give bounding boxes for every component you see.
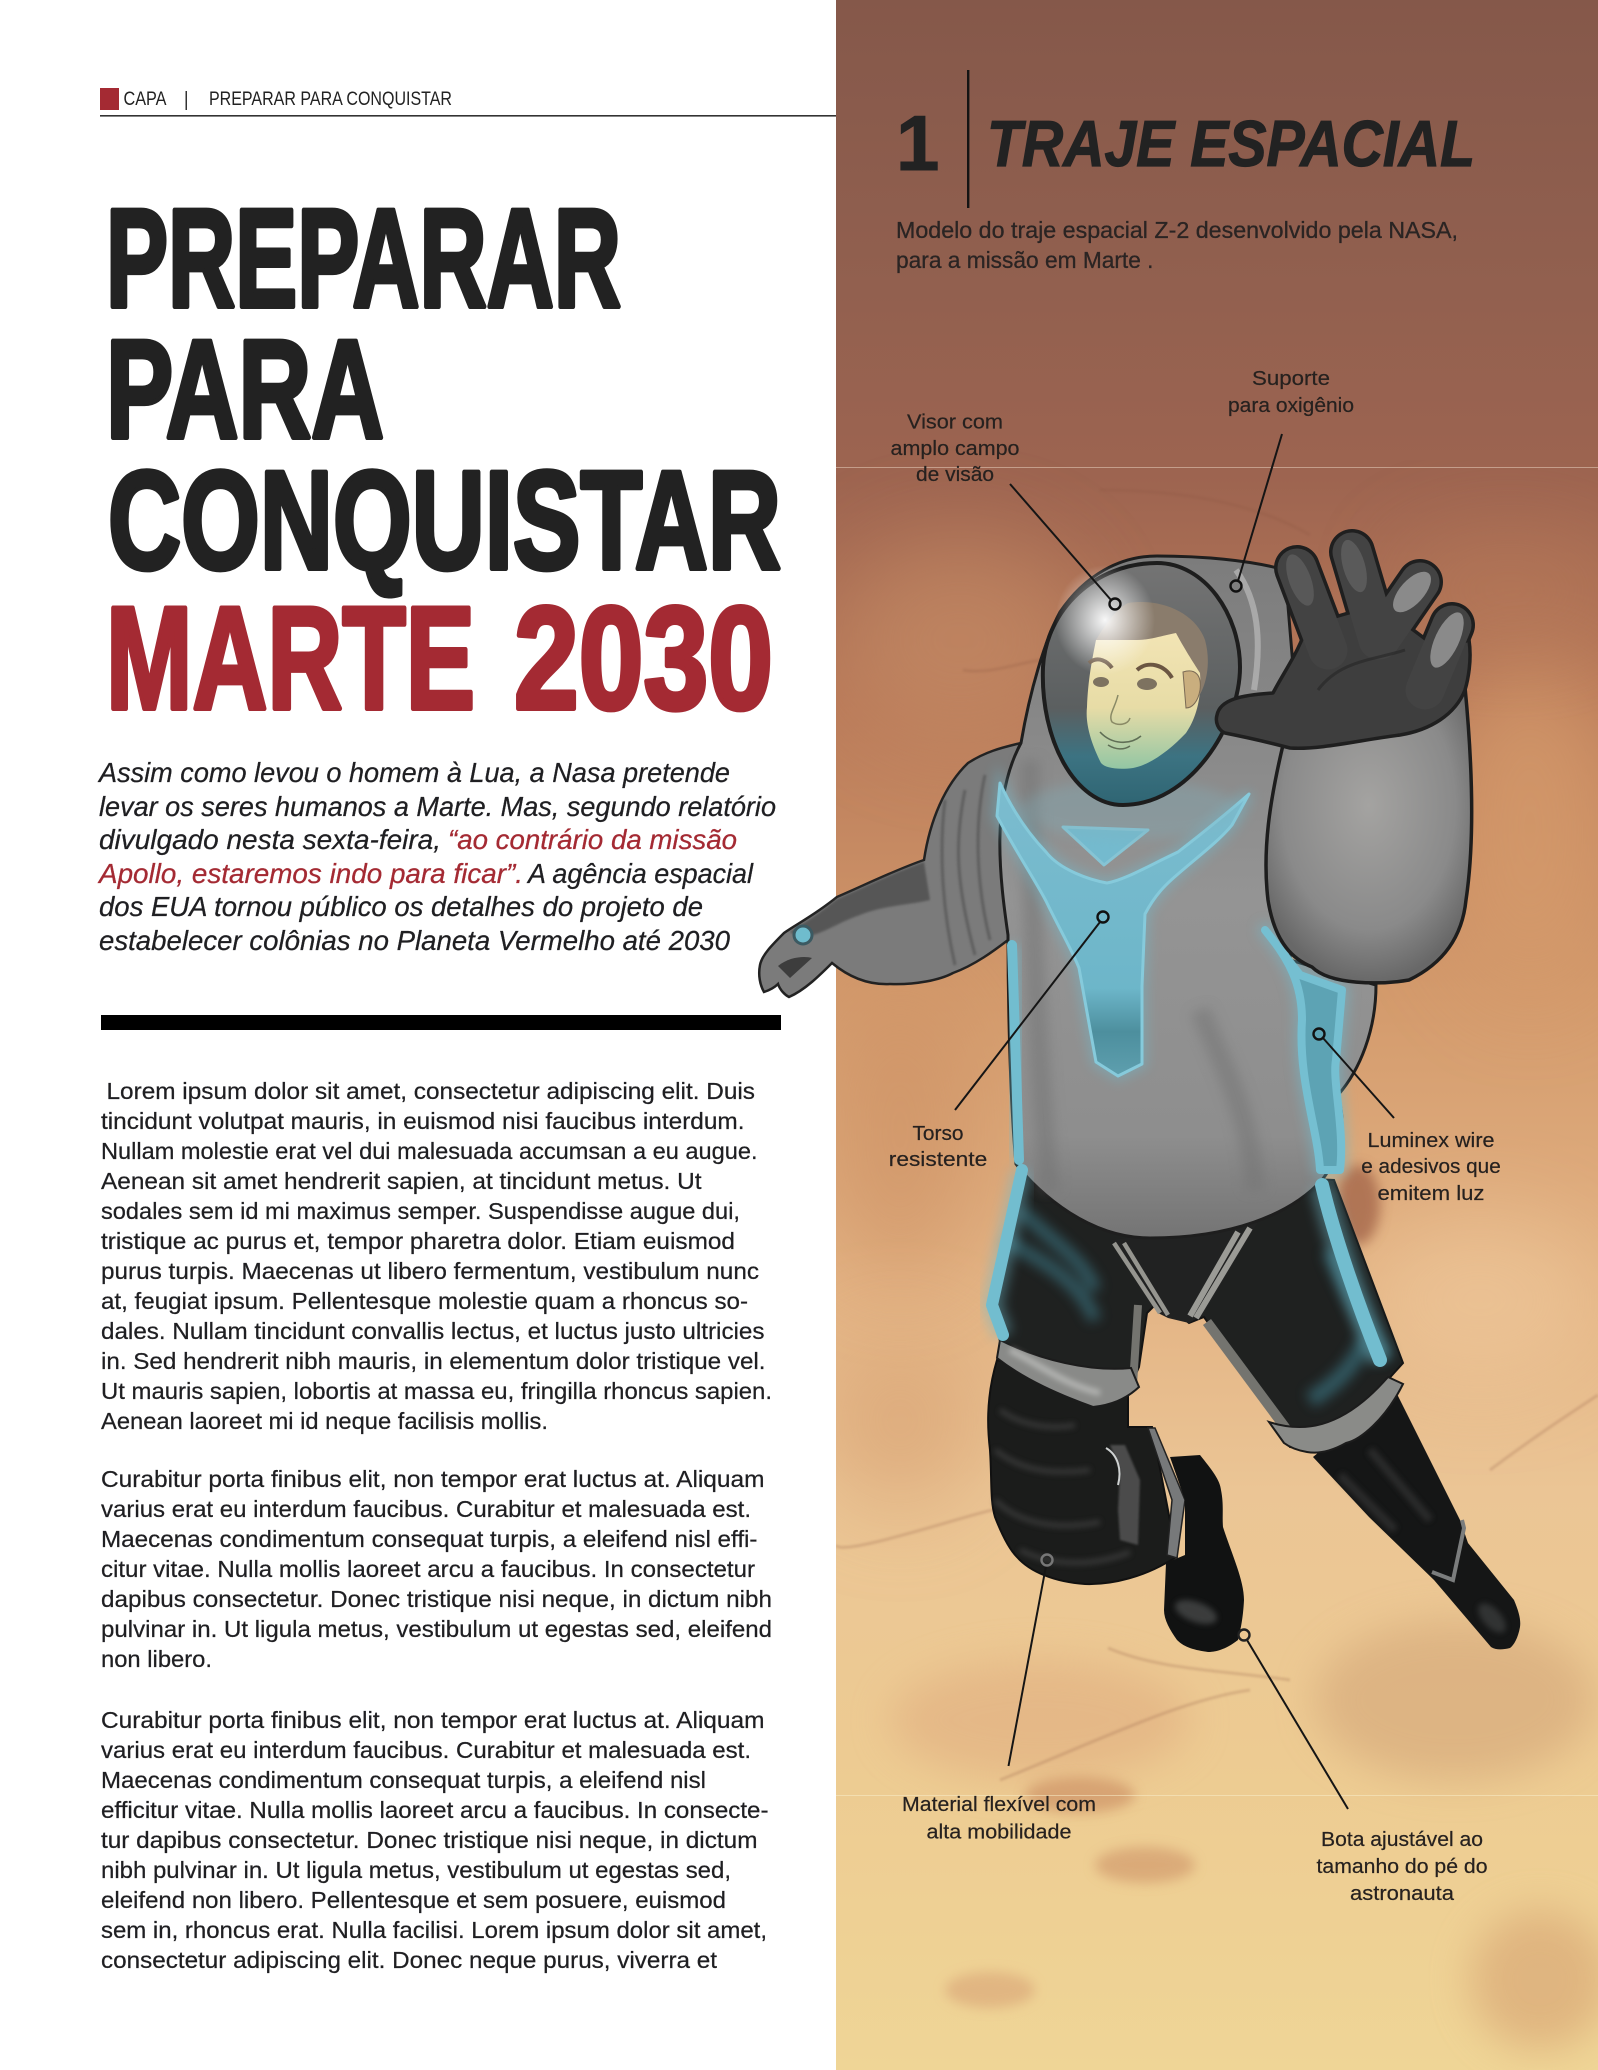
body text: non libero. — [101, 1646, 212, 1672]
body text: varius erat eu interdum faucibus. Curabitur et malesuada est. — [101, 1737, 751, 1763]
inner thigh strip — [1207, 1322, 1287, 1430]
wrist light — [794, 926, 812, 944]
leader line — [1008, 1566, 1046, 1766]
title — [106, 180, 781, 740]
body text: varius erat eu interdum faucibus. Curabitur et malesuada est. — [101, 1496, 751, 1522]
section subtitle: Modelo do traje espacial Z-2 desenvolvido pela NASA, — [896, 217, 1458, 243]
label: astronauta — [1350, 1882, 1455, 1905]
finger fills — [1297, 552, 1452, 690]
torso and hood — [1000, 556, 1376, 1238]
intro text: A agência espacial — [526, 858, 754, 889]
body text: Ut mauris sapien, lobortis at massa eu, fringilla rhoncus sapien. — [101, 1378, 772, 1404]
intro text: Assim como levou o homem à Lua, a Nasa pretende — [97, 757, 730, 788]
section header — [100, 88, 836, 117]
body text: dapibus consectetur. Donec tristique nisi neque, in dictum nibh — [101, 1586, 772, 1612]
title: PARA — [106, 310, 384, 468]
body text: sodales sem id mi maximus semper. Suspendisse augue dui, — [101, 1198, 740, 1224]
label: para oxigênio — [1228, 394, 1354, 417]
leader line — [1247, 1640, 1348, 1809]
illustration: astronaut in Z-2 suit — [759, 537, 1520, 1652]
intro text — [97, 757, 776, 956]
body text: Maecenas condimentum consequat turpis, a eleifend nisl — [101, 1767, 706, 1793]
running title: PREPARAR PARA CONQUISTAR — [209, 88, 452, 110]
label: tamanho do pé do — [1316, 1855, 1488, 1878]
label: Material flexível com — [902, 1793, 1096, 1816]
callout: bota ajustavel — [1238, 1630, 1488, 1905]
label: Bota ajustável ao — [1321, 1828, 1483, 1851]
lower right leg — [1313, 1390, 1520, 1649]
label: alta mobilidade — [926, 1820, 1072, 1844]
body text: Lorem ipsum dolor sit amet, consectetur adipiscing elit. Duis — [106, 1078, 755, 1104]
body text: pulvinar in. Ut ligula metus, vestibulum ut egestas sed, eleifend — [101, 1616, 772, 1642]
intro text: levar os seres humanos a Marte. Mas, segundo relatório — [99, 791, 776, 822]
label: resistente — [889, 1148, 987, 1171]
intro text: estabelecer colônias no Planeta Vermelho até 2030 — [99, 925, 731, 956]
section title: TRAJE ESPACIAL — [987, 107, 1475, 180]
label: emitem luz — [1378, 1182, 1484, 1205]
intro text: Apollo, estaremos indo para ficar”. — [97, 858, 523, 889]
leader line — [1010, 484, 1111, 600]
panel heading: traje espacial: para a missão em Marte . — [896, 247, 1154, 273]
label: Suporte — [1252, 367, 1330, 390]
body text: Aenean laoreet mi id neque facilisis mollis. — [101, 1408, 548, 1434]
right knee cuff — [1269, 1377, 1403, 1453]
label — [1316, 1828, 1488, 1905]
label: de visão — [916, 463, 994, 486]
body text: purus turpis. Maecenas ut libero fermentum, vestibulum nunc — [101, 1258, 759, 1284]
body text: at, feugiat ipsum. Pellentesque molestie quam a rhoncus so- — [101, 1288, 748, 1314]
label: e adesivos que — [1361, 1155, 1501, 1178]
callout: suporte para oxigenio — [1228, 367, 1354, 592]
body text: tincidunt volutpat mauris, in euismod nisi faucibus interdum. — [101, 1108, 744, 1134]
label: amplo campo — [890, 437, 1020, 460]
boot — [1164, 1455, 1244, 1652]
crotch panel — [1112, 1222, 1258, 1323]
leader line — [955, 922, 1100, 1110]
title: PREPARAR — [106, 180, 621, 336]
finger outlines — [1297, 552, 1452, 690]
title: CONQUISTAR — [108, 442, 781, 598]
label — [1228, 367, 1354, 417]
body text: Curabitur porta finibus elit, non tempor erat luctus at. Aliquam — [101, 1707, 764, 1733]
panel heading: traje espacial — [896, 70, 1475, 273]
body text: in. Sed hendrerit nibh mauris, in elementum dolor tristique vel. — [101, 1348, 765, 1374]
collar strap — [1236, 570, 1258, 690]
body text: Nullam molestie erat vel dui malesuada accumsan a eu augue. — [101, 1138, 758, 1164]
helmet visor — [1043, 563, 1258, 805]
lower left leg — [988, 1360, 1177, 1584]
body text: nibh pulvinar in. Ut ligula metus, vestibulum ut egestas sed, — [101, 1857, 731, 1883]
icon: red square — [100, 88, 119, 110]
body text: citur vitae. Nulla mollis laoreet arcu a faucibus. In consectetur — [101, 1556, 755, 1582]
body text: tristique ac purus et, tempor pharetra dolor. Etiam euismod — [101, 1228, 735, 1254]
body text — [101, 1078, 772, 1973]
intro text: “ao contrário da missão — [448, 824, 737, 855]
callout: material flexivel — [902, 1554, 1096, 1844]
hair — [1096, 602, 1208, 700]
intro text: dos EUA tornou público os detalhes do projeto de — [99, 891, 703, 922]
leader line — [1323, 1038, 1394, 1118]
ear — [1183, 671, 1200, 708]
section number: 1 — [896, 99, 939, 187]
body text: Maecenas condimentum consequat turpis, a eleifend nisl effi- — [101, 1526, 758, 1552]
label — [890, 410, 1020, 486]
left arm and hand — [759, 743, 1021, 997]
legs — [988, 1165, 1520, 1652]
body text: Aenean sit amet hendrerit sapien, at tincidunt metus. Ut — [101, 1168, 702, 1194]
section label: CAPA — [124, 88, 166, 110]
body text: efficitur vitae. Nulla mollis laoreet arcu a faucibus. In consecte- — [101, 1797, 768, 1823]
intro text: divulgado nesta sexta-feira, — [99, 824, 441, 855]
body text: sem in, rhoncus erat. Nulla facilisi. Lorem ipsum dolor sit amet, — [101, 1917, 767, 1943]
body text: eleifend non libero. Pellentesque et sem posuere, euismod — [101, 1887, 726, 1913]
right glove — [1216, 537, 1471, 748]
palm — [1216, 612, 1470, 748]
eyes and brows — [1089, 659, 1172, 678]
label: Visor com — [907, 410, 1003, 434]
visor highlight — [1055, 565, 1155, 675]
label: Luminex wire — [1368, 1129, 1494, 1152]
body text: tur dapibus consectetur. Donec tristique nisi neque, in dictum — [101, 1827, 758, 1853]
label — [1361, 1129, 1501, 1205]
callout: luminex wire — [1314, 1028, 1501, 1205]
title: MARTE — [106, 576, 475, 740]
title: 2030 — [514, 576, 773, 740]
callout: torso — [889, 912, 1108, 1171]
body text: Curabitur porta finibus elit, non tempor erat luctus at. Aliquam — [101, 1466, 764, 1492]
body text: consectetur adipiscing elit. Donec neque purus, viverra et — [101, 1947, 717, 1973]
chest Y-shaped light — [997, 780, 1249, 1076]
divider bar — [101, 1015, 781, 1030]
leader line — [1238, 434, 1282, 581]
upper right arm — [1266, 687, 1472, 983]
body text: dales. Nullam tincidunt convallis lectus, et luctus justo ultricies — [101, 1318, 764, 1344]
torso shading — [1030, 760, 1255, 1190]
label — [902, 1793, 1096, 1844]
panel: mars background — [820, 0, 1598, 2070]
thighs — [990, 1165, 1403, 1452]
label — [889, 1122, 987, 1171]
side luminex strips — [992, 930, 1380, 1360]
callout: visor — [890, 410, 1120, 610]
foot connector — [1148, 1428, 1185, 1558]
label: Torso — [912, 1122, 964, 1145]
face — [1087, 633, 1200, 769]
left knee cuff — [997, 1340, 1139, 1407]
